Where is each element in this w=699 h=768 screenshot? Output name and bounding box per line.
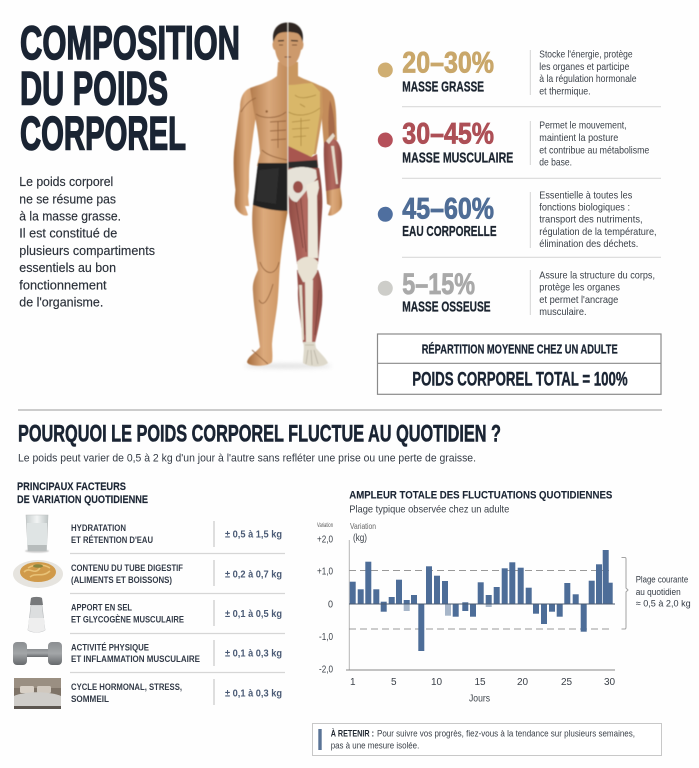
- factor row: activité physique: [13, 640, 282, 666]
- left leg: [247, 205, 288, 366]
- stat: masse grasse: 20–30%: [402, 47, 494, 80]
- stat: masse osseuse: protège les organes: [539, 283, 620, 294]
- stat: eau corporelle: Essentielle à toutes les: [539, 190, 632, 201]
- anatomical figure: [234, 22, 342, 368]
- intro text block: [19, 175, 155, 309]
- intro text block: essentiels au bon: [19, 261, 116, 275]
- factors heading: [17, 481, 148, 506]
- knee: [297, 257, 318, 282]
- stat: masse osseuse: musculaire.: [539, 307, 587, 318]
- factor row: sel: [28, 597, 282, 632]
- x axis labels: 30: [604, 677, 616, 688]
- body shading on left half: [241, 98, 287, 364]
- stat: masse musculaire: de base.: [539, 158, 572, 169]
- title: DU POIDS: [20, 61, 168, 114]
- y axis labels: +2,0: [317, 534, 333, 545]
- y axis labels: -2,0: [319, 665, 333, 676]
- total box: [378, 334, 661, 394]
- factor row: activité physique: ACTIVITÉ PHYSIQUE: [71, 641, 149, 653]
- factor row: sel: APPORT EN SEL: [71, 603, 132, 614]
- right hand: [326, 186, 342, 216]
- intro text block: Il est constitué de: [19, 227, 117, 241]
- x axis labels: [350, 677, 616, 705]
- title: COMPOSITION: [20, 16, 240, 69]
- stat: eau corporelle: [378, 190, 657, 250]
- factor row: cycle hormonal: [14, 678, 282, 709]
- factor row: hydratation: HYDRATATION: [71, 523, 126, 534]
- callout: pas à une mesure isolée.: [331, 740, 419, 751]
- stat: eau corporelle: transport des nutriments,: [539, 215, 643, 226]
- torso right shoulder: [288, 62, 323, 160]
- callout: [312, 724, 662, 756]
- stat: masse grasse: [378, 47, 637, 97]
- factor row: hydratation: [25, 515, 282, 553]
- stat: eau corporelle: fonctions biologiques :: [539, 203, 630, 214]
- right arm: [318, 85, 337, 145]
- tibia: [305, 280, 313, 342]
- bars: [350, 550, 613, 651]
- stat: eau corporelle: EAU CORPORELLE: [402, 223, 497, 240]
- factor row: cycle hormonal: CYCLE HORMONAL, STRESS,: [71, 682, 182, 693]
- torso left half: [250, 62, 288, 166]
- x axis labels: 1: [350, 677, 356, 688]
- centre line: [287, 22, 289, 212]
- factor row: cycle hormonal: ± 0,1 à 0,3 kg: [225, 688, 282, 699]
- title: [20, 16, 240, 159]
- factor row: tube digestif: CONTENU DU TUBE DIGESTIF: [71, 563, 183, 574]
- stat: masse musculaire: Permet le mouvement,: [539, 120, 627, 131]
- y axis labels: [317, 522, 376, 676]
- factor row: tube digestif: ± 0,2 à 0,7 kg: [225, 569, 282, 580]
- icon: water glass: [25, 515, 49, 553]
- factor row: cycle hormonal: SOMMEIL: [71, 694, 109, 705]
- section heading: Le poids peut varier de 0,5 à 2 kg d'un jour à l'autre sans refléter une prise ou une perte de graisse.: [18, 453, 476, 465]
- intro text block: ne se résume pas: [19, 192, 116, 206]
- factors heading: DE VARIATION QUOTIDIENNE: [17, 494, 148, 506]
- icon: dumbbell: [13, 642, 62, 665]
- y axis labels: (kg): [353, 533, 367, 544]
- stat: eau corporelle: élimination des déchets.: [539, 239, 638, 250]
- chart heading: Plage typique observée chez un adulte: [349, 503, 509, 515]
- x axis labels: 20: [517, 677, 529, 688]
- x axis labels: 10: [431, 677, 443, 688]
- factor row: activité physique: ET INFLAMMATION MUSCULAIRE: [71, 654, 200, 665]
- stat: masse grasse: à la régulation hormonale: [539, 74, 637, 85]
- bar chart: [317, 522, 691, 705]
- stat: eau corporelle: 45–60%: [402, 192, 494, 225]
- title: CORPOREL: [20, 106, 186, 159]
- x axis labels: Jours: [469, 694, 490, 705]
- factor row: tube digestif: (ALIMENTS ET BOISSONS): [71, 575, 172, 586]
- factor row: hydratation: ET RÉTENTION D'EAU: [71, 534, 153, 546]
- intro text block: de l'organisme.: [19, 295, 103, 309]
- total box: RÉPARTITION MOYENNE CHEZ UN ADULTE: [422, 341, 618, 356]
- abdominal muscle: [288, 146, 318, 166]
- range note: au quotidien: [636, 587, 681, 598]
- stat: masse grasse: les organes et participe: [539, 62, 630, 73]
- x axis labels: 25: [561, 677, 573, 688]
- y axis labels: -1,0: [319, 632, 333, 643]
- y axis labels: 0: [328, 599, 333, 610]
- head: [272, 24, 304, 67]
- callout: Pour suivre vos progrès, fiez-vous à la tendance sur plusieurs semaines,: [377, 729, 635, 740]
- factor row: activité physique: ± 0,1 à 0,3 kg: [225, 649, 282, 660]
- intro text block: fonctionnement: [19, 278, 107, 292]
- chart heading: [349, 489, 612, 515]
- pelvis: [288, 167, 317, 202]
- femur: [306, 180, 319, 258]
- factor row: sel: ET GLYCOGÈNE MUSCULAIRE: [71, 613, 184, 625]
- section heading: [18, 421, 501, 465]
- callout: À RETENIR :: [331, 729, 374, 740]
- icon: bed: [14, 678, 61, 709]
- intro text block: plusieurs compartiments: [19, 244, 155, 258]
- range note: Plage courante: [636, 575, 688, 586]
- calf muscle: [297, 270, 322, 343]
- stat: masse grasse: MASSE GRASSE: [402, 79, 484, 96]
- x axis labels: 15: [474, 677, 486, 688]
- stat: masse musculaire: 30–45%: [402, 117, 494, 150]
- chart heading: AMPLEUR TOTALE DES FLUCTUATIONS QUOTIDIENNES: [349, 489, 612, 501]
- stat: eau corporelle: régulation de la température,: [539, 227, 657, 238]
- icon: pasta plate: [13, 560, 63, 588]
- stat: masse musculaire: et contribue au métabolisme: [539, 145, 650, 156]
- stat: masse musculaire: [378, 117, 650, 169]
- stat: masse osseuse: et permet l'ancrage: [539, 295, 619, 306]
- forearm muscle: [324, 138, 342, 191]
- stat: masse osseuse: [378, 268, 655, 318]
- shorts: dark half: [253, 163, 288, 211]
- range note: [636, 575, 691, 610]
- factor row: tube digestif: [13, 560, 282, 588]
- right thigh muscle: [288, 168, 322, 264]
- icon: salt shaker: [28, 597, 45, 632]
- stat: masse grasse: Stocke l'énergie, protège: [539, 49, 633, 60]
- intro text block: à la masse grasse.: [19, 210, 121, 224]
- stat: masse osseuse: 5–15%: [402, 268, 475, 301]
- left arm: [234, 88, 262, 216]
- x axis labels: 5: [391, 677, 397, 688]
- y axis labels: +1,0: [317, 566, 333, 577]
- range bracket: [622, 558, 628, 629]
- y axis labels: Variation: [317, 523, 333, 529]
- y axis labels: Variation: [350, 522, 376, 531]
- stat: masse grasse: et thermique.: [539, 86, 591, 97]
- stat: masse osseuse: Assure la structure du corps,: [539, 270, 655, 281]
- stat: masse musculaire: MASSE MUSCULAIRE: [402, 149, 513, 166]
- factor row: sel: ± 0,1 à 0,5 kg: [225, 609, 282, 620]
- stat: masse osseuse: MASSE OSSEUSE: [402, 299, 491, 316]
- factors heading: PRINCIPAUX FACTEURS: [17, 481, 126, 493]
- stat: masse musculaire: maintient la posture: [539, 133, 619, 144]
- fat layer: [288, 83, 320, 157]
- range note: ≈ 0,5 à 2,0 kg: [636, 599, 691, 610]
- foot bones: [303, 342, 328, 366]
- factor row: hydratation: ± 0,5 à 1,5 kg: [225, 530, 282, 541]
- intro text block: Le poids corporel: [19, 175, 113, 189]
